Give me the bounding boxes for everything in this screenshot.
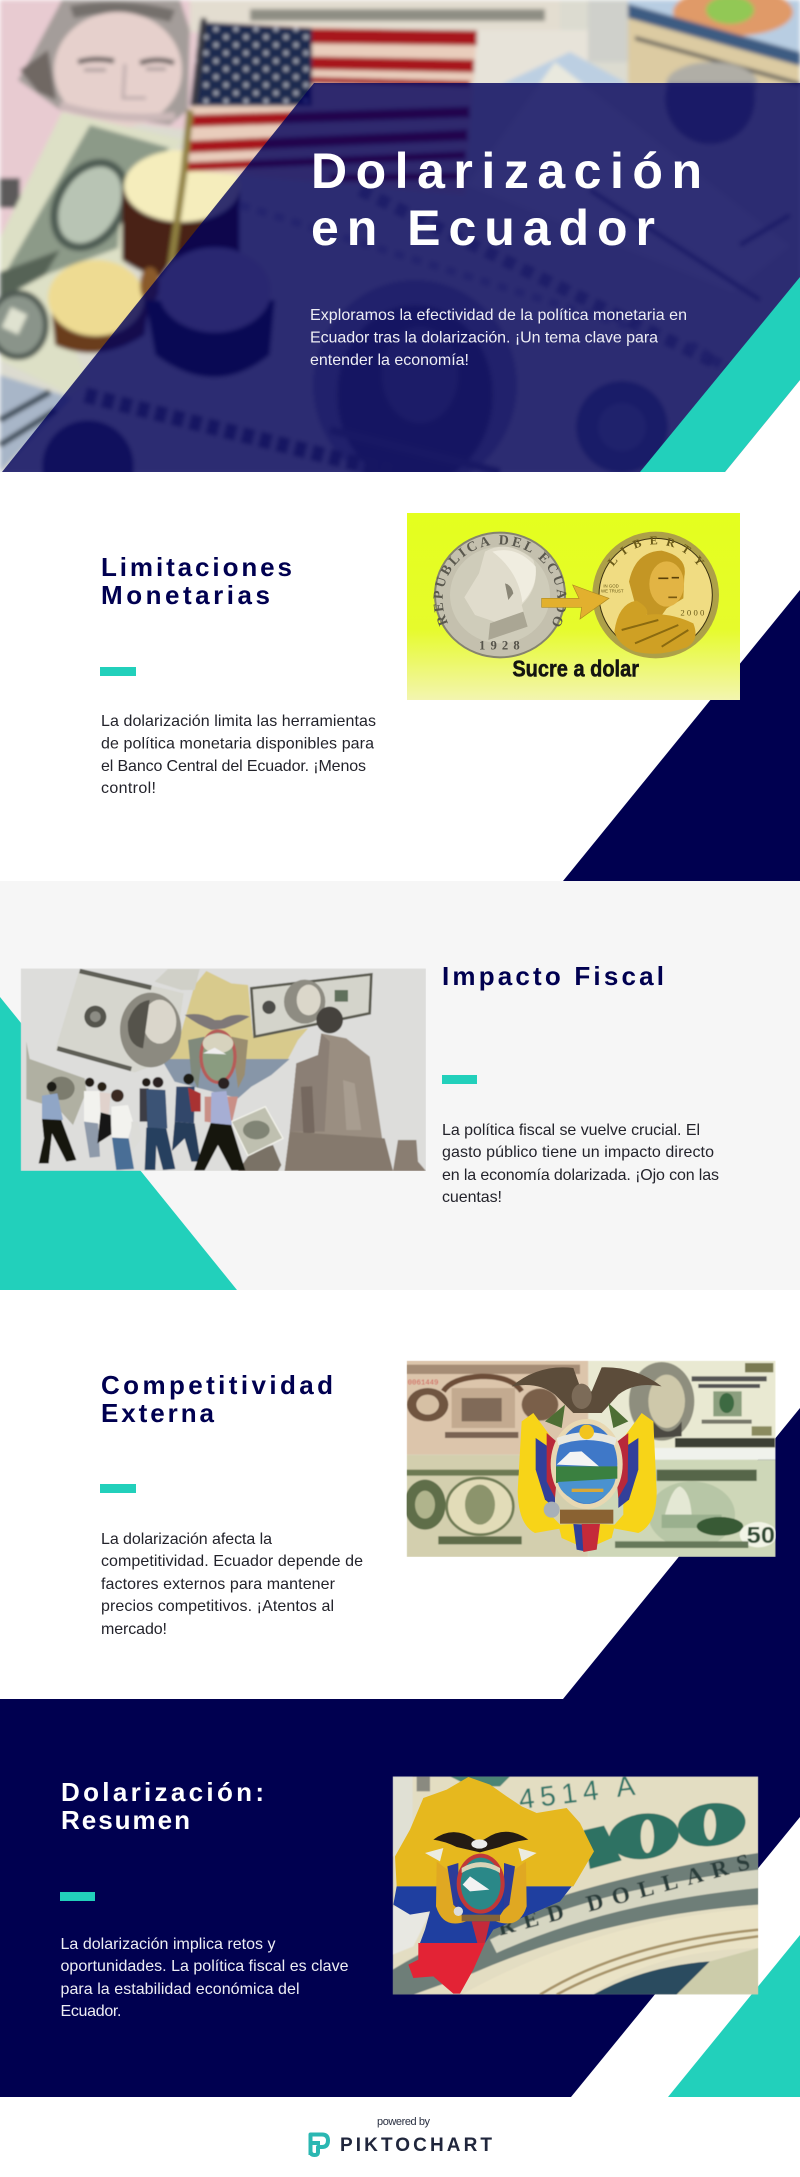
gold coins — [122, 190, 240, 280]
hero intro text: entender la economía! — [310, 352, 469, 369]
silver sucre coin: REPUBLICA DEL ECUADOR — [433, 535, 566, 627]
ecuador coat of arms — [512, 1367, 662, 1552]
body text: mercado! — [101, 1621, 167, 1638]
body text: competitividad. Ecuador depende de — [101, 1553, 363, 1570]
body text — [442, 1122, 719, 1206]
bill edges — [462, 1994, 590, 1995]
title: en Ecuador — [311, 200, 655, 256]
coat of arms on map — [425, 1832, 537, 1943]
image: ecuador collage — [21, 968, 426, 1171]
panel: limitaciones monetarias — [100, 513, 800, 881]
body text — [60, 1936, 349, 2020]
piktochart wordmark: PIKTOCHART — [340, 2135, 492, 2156]
icon: piktochart logo — [310, 2134, 328, 2155]
body text: Ecuador. — [60, 2003, 122, 2020]
gold dollar coin: WE TRUST — [601, 589, 624, 594]
teal accent bar — [442, 1075, 477, 1084]
monument — [290, 1033, 382, 1139]
blue overlay — [2, 83, 800, 472]
teal accent bar — [100, 667, 136, 676]
body text: La dolarización implica retos y — [60, 1936, 276, 1953]
image: ecuador map over 100 dollar bills: RED DOLLARS — [495, 1849, 753, 1941]
gold dollar coin: 2000 — [680, 607, 704, 617]
body text: cuentas! — [442, 1189, 502, 1206]
hero intro text: Ecuador tras la dolarización. ¡Un tema clave para — [310, 330, 658, 346]
ecuador coat of arms — [185, 1014, 250, 1030]
body text: factores externos para mantener — [101, 1576, 336, 1593]
heading: Externa — [101, 1398, 215, 1428]
white wedge — [571, 1817, 800, 2097]
footer: powered by piktochart — [310, 2116, 492, 2156]
body text: el Banco Central del Ecuador. ¡Menos — [101, 758, 366, 775]
image: ecuador map over 100 dollar bills: 4514 A — [517, 1770, 637, 1815]
image: banknotes and coat of arms: 50 — [747, 1522, 775, 1548]
coins under overlay — [145, 300, 275, 378]
hero intro text: Exploramos la efectividad de la política monetaria en — [310, 307, 687, 324]
panel: resumen — [0, 1699, 800, 2097]
image: ecuador map over 100 dollar bills — [393, 1770, 758, 1995]
teal accent bar — [100, 1484, 136, 1493]
lincoln — [18, 0, 190, 125]
sucre note green — [407, 1470, 522, 1476]
heading: Resumen — [61, 1805, 190, 1835]
falling bills — [26, 1042, 86, 1125]
silver sucre coin — [433, 532, 566, 658]
body text: en la economía dolarizada. ¡Ojo con las — [442, 1167, 719, 1184]
body text — [101, 713, 376, 797]
heading — [101, 552, 292, 610]
body text: La dolarización limita las herramientas — [101, 713, 376, 730]
panel: competitividad externa — [100, 1361, 800, 1699]
teal wedge — [640, 277, 800, 472]
people walking — [39, 1074, 245, 1170]
sucre note brown — [407, 1365, 580, 1374]
us 50 back — [657, 1470, 757, 1481]
navy corner wedge — [563, 590, 800, 881]
powered by label: powered by — [377, 2116, 430, 2128]
heading: Limitaciones — [101, 552, 292, 582]
us 50 note — [629, 1362, 694, 1441]
left dollar bill — [0, 112, 185, 395]
section background — [0, 881, 800, 1290]
image caption: Sucre a dolar — [512, 655, 639, 681]
teal corner shape — [0, 997, 237, 1290]
heading — [101, 1370, 333, 1428]
heading — [61, 1777, 264, 1835]
heading: Competitividad — [101, 1370, 333, 1400]
body text: de política monetaria disponibles para — [101, 736, 374, 752]
image: sucre to dollar coins — [407, 513, 740, 700]
white corner wedge — [725, 380, 800, 472]
hero intro text — [310, 307, 687, 369]
banknote under the blue overlay — [538, 62, 584, 83]
title: Dolarización — [311, 143, 702, 199]
heading: Dolarización: — [61, 1777, 264, 1807]
body text: La política fiscal se vuelve crucial. El — [442, 1122, 700, 1139]
navy corner wedge — [563, 1408, 800, 1699]
heading: Impacto Fiscal — [442, 961, 664, 991]
teal wedge — [668, 1935, 800, 2097]
title — [311, 143, 702, 256]
panel: hero — [0, 0, 800, 512]
gold dollar coin: LIBERTY — [607, 536, 704, 566]
hero photo: dollars, coins and US flag — [0, 0, 800, 512]
body text — [101, 1531, 363, 1638]
navy background — [0, 1699, 800, 2097]
US flag — [187, 26, 476, 176]
flag pole — [194, 18, 204, 106]
body text: para la estabilidad económica del — [60, 1981, 300, 1998]
body text: control! — [101, 780, 156, 797]
gold dollar coin: IN GOD — [603, 583, 619, 588]
panel: impacto fiscal — [0, 881, 800, 1290]
image: banknotes and coat of arms: 0061449 — [408, 1380, 438, 1388]
image: banknotes and coat of arms — [404, 1361, 777, 1557]
gold dollar coin — [592, 532, 719, 658]
teal accent bar — [60, 1892, 95, 1901]
heading: Monetarias — [101, 580, 270, 610]
body text: La dolarización afecta la — [101, 1531, 272, 1548]
silver sucre coin: 1928 — [479, 638, 520, 652]
body text: precios competitivos. ¡Atentos al — [101, 1598, 334, 1615]
arrow — [542, 585, 609, 619]
ecuador flag map — [393, 1777, 594, 1994]
body text: oportunidades. La política fiscal es clave — [60, 1958, 349, 1975]
body text: gasto público tiene un impacto directo — [442, 1144, 714, 1161]
dollars band — [393, 1853, 758, 1995]
